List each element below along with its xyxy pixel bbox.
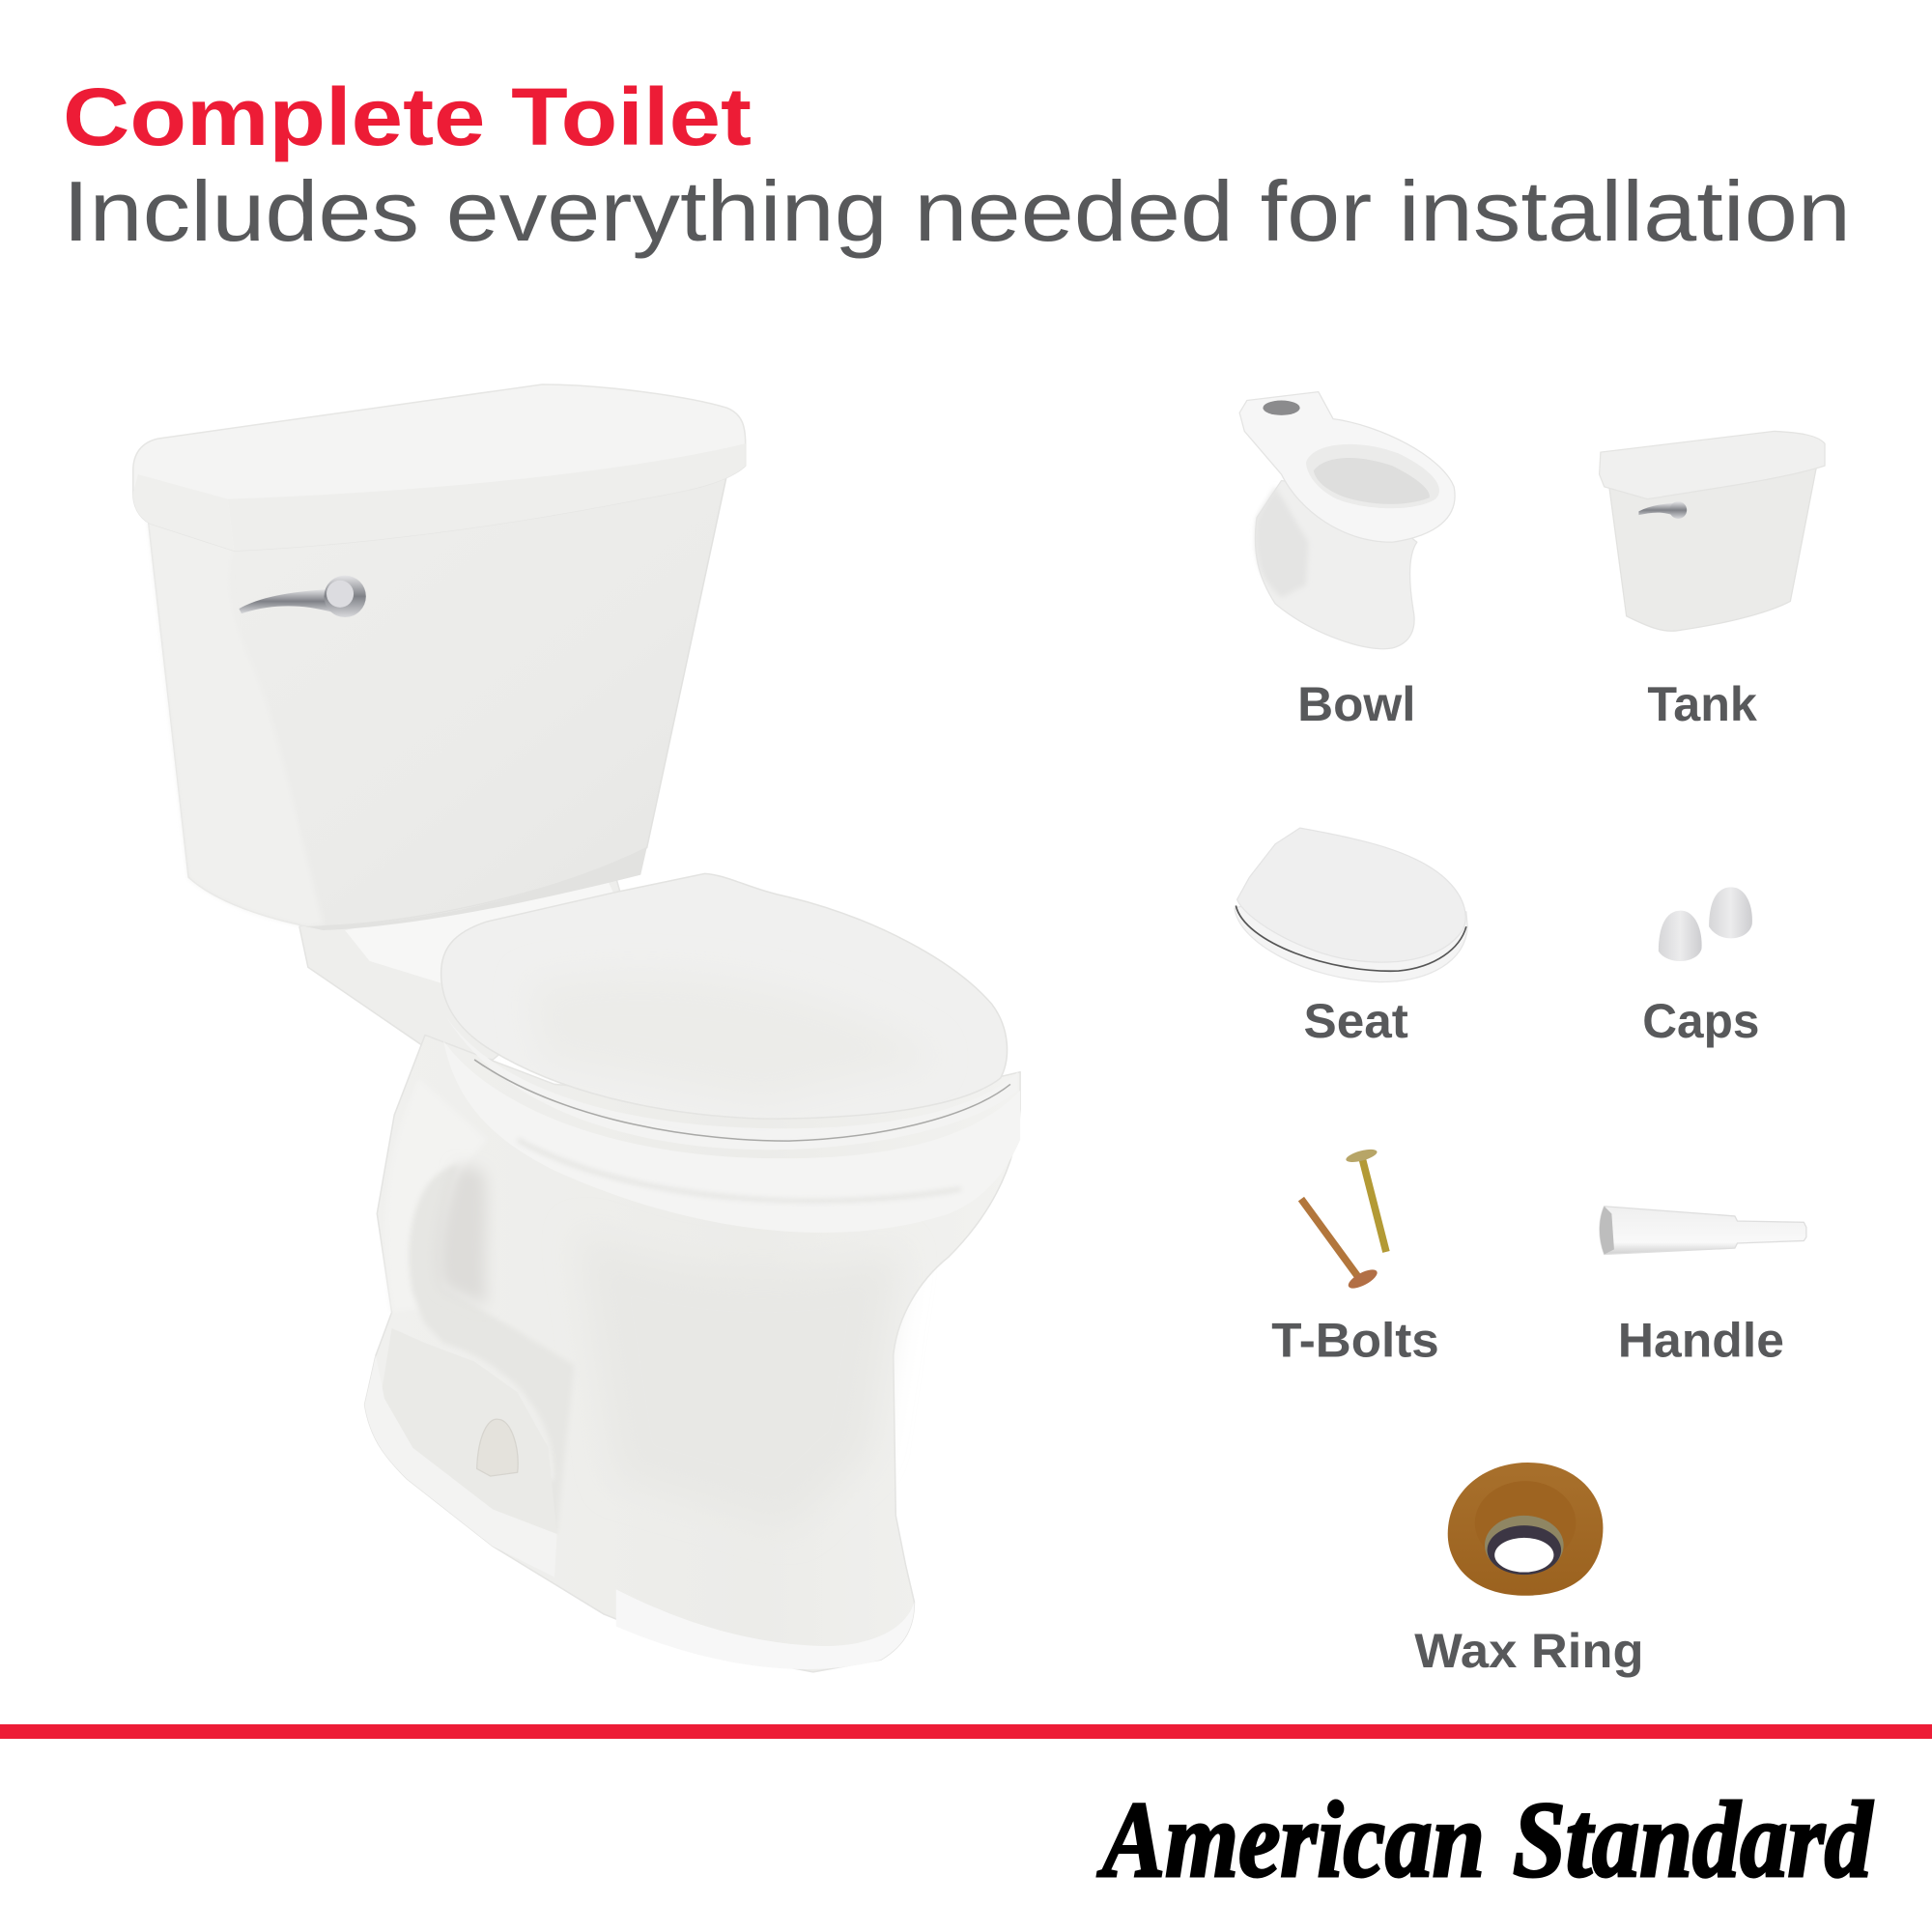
parts grid (1235, 392, 1825, 1678)
part: seat (1235, 828, 1467, 982)
part: handle (1600, 1207, 1806, 1254)
part: caps (1659, 887, 1752, 961)
logo: American Standard (1097, 1780, 1874, 1900)
side recess (409, 1164, 574, 1534)
label: Caps: Caps (1642, 994, 1759, 1048)
seat lid (441, 873, 1008, 1119)
part: wax ring (1448, 1463, 1603, 1596)
title: Complete Toilet: Complete Toilet (63, 71, 752, 162)
bowl rim (443, 1041, 1020, 1233)
logo: American Standard: Standard (1513, 1780, 1874, 1900)
label: Handle: Handle (1618, 1313, 1784, 1367)
logo: American Standard: American (1097, 1780, 1485, 1900)
red divider bar (0, 1724, 1932, 1739)
trapway arm (385, 1078, 487, 1312)
part: tank (1600, 431, 1825, 631)
main toilet illustration (133, 384, 1020, 1672)
label: T-Bolts: T-Bolts (1271, 1313, 1439, 1367)
bolt cap (477, 1419, 518, 1476)
bowl shading (579, 1233, 899, 1528)
base platform (380, 1328, 557, 1534)
label: Seat: Seat (1303, 994, 1408, 1048)
base rim highlight (616, 1589, 914, 1669)
tank body (148, 474, 727, 930)
subtitle: Includes everything needed for installation (63, 163, 1851, 259)
part: t-bolts (1301, 1147, 1386, 1292)
flush handle (239, 576, 366, 617)
label: Wax Ring: Wax Ring (1414, 1624, 1644, 1678)
part: bowl (1239, 392, 1455, 649)
tank lid (133, 384, 746, 551)
seat ring (446, 1016, 1018, 1150)
bowl body (365, 1035, 1020, 1672)
label: Bowl: Bowl (1297, 677, 1416, 731)
bowl deck connector (299, 865, 640, 1060)
label: Tank: Tank (1647, 677, 1757, 731)
